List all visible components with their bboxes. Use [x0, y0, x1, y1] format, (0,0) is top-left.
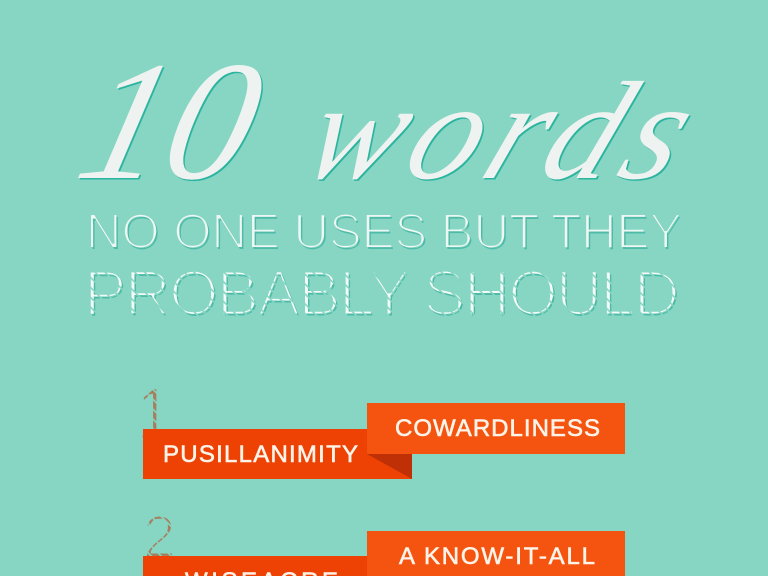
title: 10 words: 10: [63, 27, 280, 215]
title: 10 words: [63, 27, 718, 215]
number 1: 1: [137, 374, 170, 457]
ribbon 1 fold: [367, 454, 412, 479]
ribbon 1 back: word: PUSILLANIMITY: [163, 441, 358, 468]
ribbon 2: [143, 531, 625, 576]
subtitle line 1: NO ONE USES BUT THEY: [86, 205, 682, 259]
title: 10 words: words: [284, 54, 718, 209]
number 2: 2: [143, 504, 176, 570]
ribbon 2 back: word: [143, 556, 412, 576]
subtitle line 2: dashed: PROBABLY SHOULD: [84, 257, 680, 329]
ribbon 1 front: meaning: [367, 403, 625, 454]
ribbon 1 front: meaning: COWARDLINESS: [395, 415, 600, 442]
ribbon 2 front: meaning: [367, 531, 625, 576]
ribbon 1: [143, 403, 625, 479]
ribbon 2 front: meaning: A KNOW-IT-ALL: [399, 543, 595, 570]
ribbon 1 back: word: [143, 429, 412, 479]
